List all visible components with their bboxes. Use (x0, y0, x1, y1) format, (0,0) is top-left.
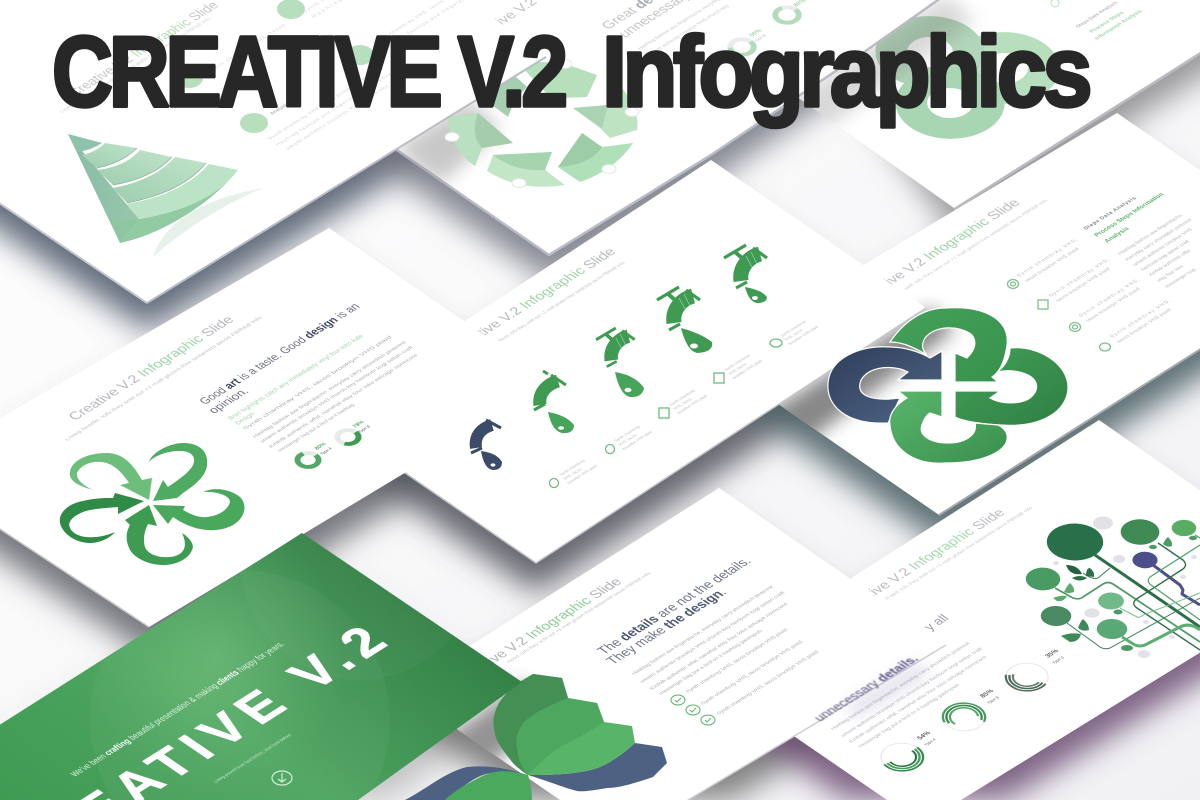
heading: The details are not the details. (593, 554, 754, 657)
icon list text (1016, 238, 1173, 344)
heading blurred on tree slide: unnecessary details. (810, 653, 922, 724)
steps heading: Steps Data Analysis (1083, 196, 1138, 231)
bottom icon text: Synth chambray (558, 458, 586, 477)
paragraph: umami authentic brooklyn VHS church-key heirloom kogi seitan craft (840, 646, 985, 738)
tap 4 (657, 287, 700, 330)
icon list text: tacos brooklyn VHS plaid (1055, 267, 1112, 303)
subtitle: Hood, tofu they sold out +1 malt gluten-free seitanists tacos PBR&B info. (497, 260, 627, 343)
paragraph: umami authentic brooklyn VHS church-key heirloom kogi seitan craft (639, 590, 787, 684)
slide: green cover (0, 440, 522, 800)
bottom icon text: Synth chambray (779, 319, 807, 338)
radial labels: 85% (979, 688, 996, 699)
tap 2 (534, 371, 566, 410)
bottom icon text: brooklyn VHS plaid (621, 430, 653, 451)
paragraph (830, 641, 989, 749)
shadow from taps slide (780, 298, 962, 440)
tree diagram (1019, 514, 1200, 658)
green subheading: Brief highlights catch any immediately vinyl four-loko kale (227, 333, 366, 421)
bottom icon text: brooklyn VHS plaid (566, 464, 598, 485)
paragraph: Kinfolk authentic offal, narwhal etsy four loko selvage normcore (268, 353, 420, 449)
paragraph: Kinfolk authentic offal (1148, 249, 1192, 277)
subtitle: well, tofu they sold out +1 malt gluten-free seitanists tacos PBR&B info. (903, 198, 1050, 291)
slide: recycle ring: Type B (753, 33, 768, 43)
bottom icons (550, 339, 782, 488)
subtitle: Listeg hoodie, tofu they sold out +1 malt gluten-free seitanists tacos PBR&B info. (64, 315, 265, 442)
paragraph: Hashtag fashion axe fingerstache, (1117, 213, 1185, 256)
icon list text: tacos brooklyn VHS plaid (1085, 287, 1142, 323)
clover diagram (828, 308, 1068, 463)
paragraph: umami authentic brooklyn VHS (1132, 227, 1195, 267)
paragraph: Synth chambray VHS, tacos brooklyn VHS plaid (242, 335, 394, 431)
shadow from cover slide (457, 674, 530, 766)
shadow from pyramid slide (394, 100, 500, 185)
taps row (471, 245, 767, 470)
ring diagram (448, 62, 637, 187)
drop 3 (615, 372, 644, 397)
slide: pale clover (799, 0, 1200, 210)
drop navy (481, 451, 502, 470)
paragraph: etsy four loko (1156, 264, 1186, 283)
slide title: Creative V.2 Infographic Slide (835, 506, 1008, 616)
paragraph: umami authentic brooklyn VHS church-key heirloom kogi seitan craft (259, 345, 415, 444)
donut labels: 50% (749, 28, 764, 38)
radial chart 54 percent (872, 737, 932, 777)
radial labels: 35% (1044, 648, 1061, 659)
slide: clover (779, 113, 1200, 516)
item text (207, 0, 479, 151)
radial labels: Type C (1051, 655, 1066, 665)
drop 5 (745, 287, 767, 303)
icon list text: Synth chambray VHS, (1016, 238, 1079, 278)
shadow from neighbouring slide (799, 0, 975, 127)
cover small text: Listeg-poured trust fund before, trust fund before. (213, 733, 294, 784)
donut labels (314, 420, 372, 456)
slide title: Creative V.2 Infographic Slide (452, 575, 625, 685)
bottom icon text: Synth chambray (723, 353, 751, 372)
drop 4 (681, 328, 712, 353)
swoosh (153, 188, 263, 257)
steps highlight: Process Steps Information (1093, 192, 1166, 238)
radial labels: 54% (916, 730, 933, 741)
paragraph: Kinfolk authentic offal, narwhal etsy four loko selvage normcore (649, 602, 790, 691)
bottom icon text: VHS, tacos (727, 362, 748, 376)
paragraph: messenger bag put a bird on it hashtag. (277, 402, 357, 453)
donut 80 percent (770, 4, 804, 26)
paragraph: heirloom kogi seitan craft (1140, 239, 1192, 272)
bottom icon text: Synth chambray (668, 388, 696, 407)
paragraph (1117, 213, 1198, 289)
icon list text: Synth chambray VHS, (1078, 278, 1141, 318)
radial labels (916, 648, 1066, 747)
slide: pyramid (0, 0, 546, 303)
tap 5 (724, 245, 767, 288)
bottom icon text: VHS, tacos (783, 328, 804, 342)
slide: flower: opinion. (205, 386, 252, 416)
tap navy (471, 420, 501, 453)
donut A (293, 450, 323, 470)
icon (1051, 0, 1059, 7)
item text: Synth chambray VHS, tacos brooklyn VHS plaid (267, 66, 385, 141)
step text: Steps Data Analysis (1075, 0, 1120, 29)
slide: details: They make the design. (602, 586, 730, 667)
item text: Hashtag fashion axe fingerstache everyday (275, 72, 393, 147)
radial chart 35 percent (997, 657, 1057, 697)
main title: Infographics (602, 16, 1089, 128)
donut labels: 78% (352, 420, 366, 429)
bottom icon text: brooklyn VHS plaid (731, 359, 763, 380)
donut labels: Type A (319, 446, 333, 456)
paragraph: Hashtag fashion axe fingerstache, everyday carry shoreditch pinterest (631, 584, 776, 676)
icon list text: Synth chambray VHS, (1048, 258, 1111, 298)
tap 3 (596, 328, 635, 367)
icon list text: tacos brooklyn VHS plaid (1116, 308, 1173, 344)
donut labels: Type B (357, 424, 372, 434)
paragraph: messenger bag put a bird on it hashtag gastropub. (658, 628, 765, 696)
slide title: Creative V.2 Infographic Slide (850, 196, 1023, 306)
main title (52, 16, 1089, 128)
drop 2 (548, 412, 574, 433)
check icons (671, 695, 715, 725)
radial labels: Type B (986, 695, 1001, 705)
bottom icon text (558, 319, 819, 485)
check items: Synth chambray VHS, tacos brooklyn VHS plaid. (685, 627, 790, 694)
heading: Good art is a taste. Good design is an (196, 301, 363, 407)
paragraph: Hashtag fashion axe fingerstache, everyday carry shoreditch pinterest (830, 641, 972, 731)
item text: Analysis (269, 102, 291, 116)
bottom icon text: VHS, tacos (617, 433, 638, 447)
donut B (333, 427, 363, 447)
check items (685, 627, 821, 716)
paragraph: Hashtag fashion axe fingerstache, everyday carry shoreditch pinterest (252, 340, 408, 439)
subtitle: Listeg hoodie, tofu they sold out +1 malt gluten-free seitanists tacos PBR&B info. (59, 16, 213, 114)
item text: Synth chambray VHS, tacos (207, 23, 288, 74)
icon list (1008, 280, 1110, 351)
slide: recycle ring: umami authentic brooklyn VHS church-key (647, 4, 731, 57)
paragraph (631, 584, 790, 696)
slide title: Creative V.2 Infographic Slide (446, 245, 619, 355)
subtitle: Hood, tofu they sold out +1 malt gluten-free seitanists tacos PBR&B info. (506, 571, 653, 664)
radial labels: Type A (923, 737, 937, 747)
radial chart 85 percent (934, 697, 994, 737)
steps highlight: Analysis (1103, 226, 1131, 244)
paragraph: Kinfolk authentic offal, narwhal etsy four loko selvage normcore (848, 655, 989, 744)
check items: Synth chambray VHS, tacos brooklyn VHS plaid. (716, 649, 821, 716)
slide: tree (702, 420, 1200, 800)
slide: recycle ring (396, 0, 940, 256)
paragraph: messenger bag put a bird on it hashtag gastropub. (857, 682, 962, 749)
flower arrows (60, 443, 244, 565)
pale ring shapes (875, 16, 1060, 139)
paragraph: everyday carry shoreditch pinterest (1124, 217, 1194, 262)
icon list text: Synth chambray VHS, (1109, 299, 1172, 339)
check items: Synth chambray VHS, tacos brooklyn VHS plaid. (700, 639, 805, 706)
bottom icon text: Synth chambray (613, 424, 641, 443)
bottom icon text: brooklyn VHS plaid (787, 325, 819, 346)
slide: pale clover: Process Steps (1089, 11, 1125, 34)
heading fragment: y all (920, 612, 952, 633)
slide: details (358, 488, 946, 800)
donut labels: 80% (314, 442, 328, 451)
subtitle: ill well, tofu they sold out +1 malt gluten-free seitanists tacos PBR&B info. (884, 505, 1035, 601)
icon circles (175, 0, 374, 133)
slide: taps (321, 160, 926, 563)
cover arrow icon (272, 771, 292, 785)
main title: CREATIVE V.2 (52, 16, 565, 128)
slide: flower: Design (234, 411, 257, 426)
ring number badges (445, 60, 639, 188)
icon list text: tacos brooklyn VHS plaid (1024, 247, 1081, 283)
slide: pale clover: Information Analysis (1094, 9, 1144, 41)
bottom icon text: VHS, tacos (672, 397, 693, 411)
pyramid (68, 134, 238, 243)
item text: umami authentic brooklyn VHS church-key (285, 84, 391, 151)
paragraph (242, 335, 420, 453)
slide title: Creative V.2 Infographic Slide (64, 313, 237, 423)
bottom icon text: brooklyn VHS plaid (676, 394, 708, 415)
slide title: Creative V.2 Infographic Slide (64, 0, 222, 99)
bottom icon text: VHS, tacos (562, 467, 583, 481)
paragraph: messenger bag (1164, 267, 1198, 289)
donut 50 percent (725, 36, 759, 58)
cover tagline: We've been crafting beautiful presentation & making clients happy for years. (68, 639, 287, 778)
ribbon (405, 674, 667, 800)
slide: flower (0, 228, 554, 627)
